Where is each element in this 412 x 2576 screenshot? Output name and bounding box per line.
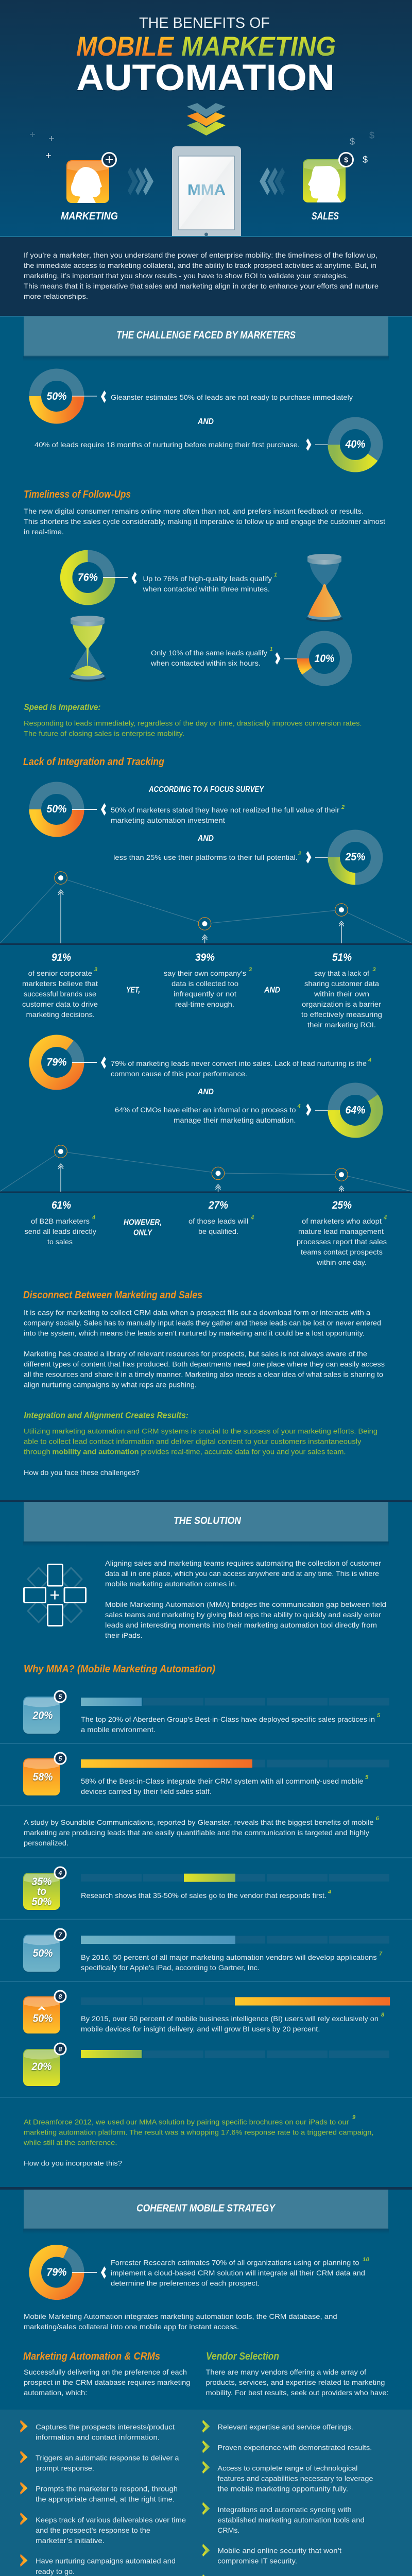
callout: less than 25 percent [113,851,340,863]
list: marketing automation bullets: marketer’s initiative. [36,2536,105,2545]
column: vendor selection intro [206,2351,389,2397]
stat row: 58 percent best in class: 5 [59,1755,62,1762]
text: aligning sales and marketing: sales teams and marketing by giving field reps the ability to quickly and easily enter [105,1611,381,1619]
heading: integration and alignment creates results: Integration and Alignment Creates Results: [24,1411,188,1420]
heading: disconnect between marketing and sales: Disconnect Between Marketing and Sales [23,1290,202,1301]
stat: 39 percent: data is collected too [171,979,238,988]
donut: 50 percent survey [35,788,78,831]
text: soundbite study: A study by Soundbite Communications, reported by Gleanster, reveals that the biggest benefits of mobile [24,1818,374,1826]
divider [0,1919,412,1920]
column: marketing automation and crms intro: Marketing Automation & CRMs [23,2351,160,2362]
stat row: 50 percent vendors: 50% [33,1947,53,1959]
text: mma integrates [24,2312,337,2331]
text: digital consumer: The new digital consumer remains online more often than not, and prefers instant feedback or results. [24,507,364,515]
donut: 79 percent [35,1041,78,1084]
callout: 50 percent of marketers: 50% of marketers stated they have not realized the full value of their [111,806,339,814]
stat: 25 percent: processes report that sales [297,1238,387,1246]
list: marketing automation bullets: information and contact information. [36,2433,160,2442]
stat: 91 percent: customer data to drive [22,1000,98,1008]
stat row: 58 percent best in class: 58% of the Best-in-Class integrate their CRM system with all commonly-used mobile [81,1777,364,1785]
donut: 50 percent survey: 50% [46,803,67,815]
text: disconnect paragraphs: It is easy for marketing to collect CRM data when a prospect fills out a download form or interacts with a [24,1309,370,1317]
stat: 27 percent: 27% [208,1199,228,1211]
text: digital consumer: This shortens the sales cycle considerably, making it imperative to follow up and engage the customer almost [24,517,385,526]
callout: gleanster 50 percent: Gleanster estimates 50% of leads are not ready to purchase immediately [111,393,353,401]
callout: 76 percent [103,572,277,593]
stat row: 50 percent vendors: By 2016, 50 percent of all major marketing automation vendors will develop applications [81,1953,377,1961]
intro text: more relationships. [24,292,88,300]
text: mma integrates: Mobile Marketing Automation integrates marketing automation tools, the CRM database, and [24,2312,337,2320]
title [76,15,336,98]
text: dreamforce 2012: while still at the conference. [23,2139,117,2147]
column: marketing automation and crms intro [23,2351,190,2397]
connector words: however only [124,1218,162,1238]
callout: 10 percent [150,646,309,667]
stat row: over 50 percent BI users: 8 [381,2012,385,2018]
text: utilizing marketing automation: through [24,1448,50,1456]
text: soundbite study: personalized. [24,1839,68,1847]
decorative dollar signs: $ [363,155,368,165]
line chart: 91 39 51 percent [0,872,412,945]
column: vendor selection intro: mobility. For best results, seek out providers who have: [206,2388,389,2397]
connector word: and: AND [197,1088,214,1096]
stat: 51 percent: to effectively measuring [301,1010,382,1019]
stat row: 20 percent best in class: 20% [32,1709,53,1721]
callout: forrester research: determine the preferences of each prospect. [111,2279,260,2287]
callout: 79 percent of leads: 4 [368,1057,371,1063]
stat row: 20 percent best in class [23,1691,389,1735]
list: marketing automation bullets: ready to go. [36,2567,75,2575]
callout: gleanster 50 percent [72,391,353,403]
title: AUTOMATION [76,58,335,98]
label: sales: SALES [312,211,339,222]
text: disconnect paragraphs: company socially. Sales has to manually input leads they gather and these leads can be lost or never entered [24,1319,381,1327]
stat row: 20 percent best in class: The top 20% of Aberdeen Group’s Best-in-Class have deployed specific sales practices in [81,1715,375,1723]
stat: 61 percent [25,1199,96,1246]
connector words: however only: ONLY [133,1229,152,1238]
list: vendor selection bullets: established marketing automation tools and [217,2516,365,2524]
arrows: marketing to tablet [128,167,153,195]
stat: 61 percent: 4 [92,1215,95,1221]
callout: forrester research [72,2257,370,2287]
text: utilizing marketing automation: able to collect lead contact information and deliver digital content to your customers instantaneously [24,1437,362,1446]
column: marketing automation and crms intro: prospect in the CRM database requires marketing [24,2378,190,2386]
stat row: 58 percent best in class: 58% [33,1771,53,1783]
donut: 76 percent: 76% [78,572,98,583]
donut: 40 percent [334,423,377,466]
column: marketing automation and crms intro: automation, which: [24,2388,87,2397]
stat: 91 percent: of senior corporate [28,969,92,977]
intro text: the immediate access to marketing collateral, and the ability to track prospect activities at anytime. But, in [24,261,376,269]
stat row: 35 to 50 percent [23,1867,389,1911]
text: aligning sales and marketing: Mobile Marketing Automation (MMA) bridges the communication gap between field [105,1600,386,1608]
stat: 51 percent: organization is a barrier [302,1000,381,1008]
line chart: 61 27 25 percent [0,1145,412,1193]
text: soundbite study [24,1816,380,1847]
panel: coherent mobile strategy [23,2190,389,2234]
text: disconnect paragraphs: Marketing has created a library of relevant resources for prospects, but sales is not always aware of the [24,1350,367,1358]
divider [0,1743,412,1744]
heading: timeliness of follow-ups: Timeliness of Follow-Ups [24,489,131,500]
text: aligning sales and marketing: mobile marketing automation comes in. [105,1580,237,1588]
callout: 79 percent of leads [72,1056,371,1078]
stat: 39 percent: 3 [249,967,252,973]
decorative dollar signs: $ [369,130,374,141]
stat: 25 percent: 4 [383,1215,387,1221]
stat: 39 percent [164,952,252,1008]
column: vendor selection intro: Vendor Selection [206,2351,279,2362]
text: digital consumer [24,507,385,536]
donut: 64 percent [334,1089,377,1132]
stat: 39 percent: 39% [195,952,215,963]
text: utilizing marketing automation [24,1427,377,1456]
callout: 76 percent: Up to 76% of high-quality leads qualify [143,574,272,583]
stat row: 20 percent best in class: a mobile environment. [81,1725,156,1734]
subheading: according to a focus survey: ACCORDING TO A FOCUS SURVEY [148,785,264,794]
stat: 61 percent: of B2B marketers [31,1217,90,1225]
stat row: 58 percent best in class [23,1753,389,1797]
panel: coherent mobile strategy: COHERENT MOBILE STRATEGY [136,2202,276,2214]
text: responding to leads [24,719,362,738]
divider [0,1805,412,1806]
stat row: over 50 percent BI users: mobile devices for insight delivery, and will grow BI users by 20 percent. [81,2025,320,2033]
list: marketing automation bullets: prompt response. [36,2464,94,2472]
connector word: yet: YET, [126,986,140,994]
connector word: and: AND [197,834,214,843]
stat: 25 percent: of marketers who adopt [302,1217,382,1225]
title: MARKETING [181,31,336,62]
stat row: over 50 percent BI users: By 2015, over 50 percent of mobile business intelligence (BI) users will rely exclusively on [81,2014,379,2023]
stat: 51 percent: within their own [314,990,369,998]
text: disconnect paragraphs: into the system, which means the leads aren’t nurtured by marketing and it could be a lost opportunity. [24,1329,365,1337]
icon: sales man [303,152,353,202]
connector word: and: AND [264,986,280,994]
stat: 25 percent: teams contact prospects [301,1248,383,1256]
stat: 51 percent [301,952,382,1029]
stat: 91 percent [22,952,98,1019]
stat row: 35 to 50 percent: Research shows that 35-50% of sales go to the vendor that responds first. [81,1891,327,1900]
callout: 79 percent of leads: common cause of this poor performance. [111,1070,247,1078]
list: vendor selection bullets: features and capabilities necessary to leverage [217,2474,373,2482]
stat: 39 percent: say their own company’s [164,969,246,977]
stat row: 20 percent BI growth: 8 [59,2045,62,2053]
stat row: 20 percent best in class: 5 [377,1713,381,1719]
panel: the solution: THE SOLUTION [174,1515,241,1527]
heading: why mma: Why MMA? (Mobile Marketing Automation) [24,1664,215,1675]
stat: 91 percent: marketers believe that [22,979,98,988]
list: vendor selection bullets: Proven experience with demonstrated results. [217,2444,372,2452]
list: vendor selection bullets: Integrations and automatic syncing with [217,2505,352,2514]
stat: 61 percent: to sales [47,1238,73,1246]
donut: 50 percent: 50% [46,391,67,402]
stat row: 20 percent BI growth: 20% [31,2061,52,2073]
heading: speed is imperative: Speed is Imperative: [24,702,101,712]
stat: 91 percent: marketing decisions. [26,1010,95,1019]
donut: 25 percent [334,836,377,879]
callout: forrester research: Forrester Research estimates 70% of all organizations using or planning to [111,2258,359,2266]
text: aligning sales and marketing: leads and interesting moments into their marketing automation tool directly from [105,1621,377,1629]
list: vendor selection bullets: Relevant expertise and service offerings. [217,2423,353,2431]
arrows: sales to tablet [260,167,285,195]
text: dreamforce 2012: 9 [352,2114,356,2121]
text: utilizing marketing automation: Utilizing marketing automation and CRM systems is crucial to the success of your marketing efforts. Being [24,1427,377,1435]
stat row: 58 percent best in class: devices carried by their field sales staff. [81,1787,212,1795]
stat row: 58 percent best in class: 5 [365,1774,369,1781]
donut: 76 percent [66,556,109,599]
stat row: 35 to 50 percent: 4 [328,1889,331,1895]
callout: 50 percent of marketers: marketing automation investment [111,816,225,824]
intro text: If you’re a marketer, then you understand the power of enterprise mobility: the timeliness of the follow up, [24,251,377,259]
stat row: 35 to 50 percent: 50% [32,1896,52,1908]
text: dreamforce 2012 [23,2114,373,2147]
stat: 25 percent: mature lead management [298,1227,384,1235]
stat: 25 percent [297,1199,387,1266]
intro text: This means that it is imperative that sales and marketing align in order to enhance your efforts and nurture [24,282,379,290]
callout: 50 percent of marketers: 2 [341,804,345,810]
callout: 10 percent: Only 10% of the same leads qualify [151,649,267,657]
stat: 61 percent: 61% [52,1199,71,1211]
callout: 10 percent: when contacted within six hours. [150,659,261,667]
stat row: 50 percent vendors [23,1929,389,1973]
text: responding to leads: The future of closing sales is enterprise mobility. [24,730,184,738]
icon: stacked chevrons [187,103,226,135]
callout: 64 percent of CMOs [115,1104,340,1124]
list: marketing automation bullets: Keeps track of various deliverables over time [36,2516,186,2524]
icon: tablet with MMA: MMA [187,182,226,198]
list: marketing automation bullets: and the prospect’s response to the [36,2526,150,2534]
donut: 25 percent: 25% [345,851,366,863]
stat row: 50 percent vendors: 7 [379,1951,383,1957]
text: dreamforce 2012: At Dreamforce 2012, we used our MMA solution by pairing specific brochures on our iPads to our [24,2118,349,2126]
text: responding to leads: Responding to leads immediately, regardless of the day or time, drastically improves conversion rates. [24,719,362,727]
callout: 64 percent of CMOs: 4 [297,1104,301,1110]
list: marketing automation bullets [20,2420,186,2576]
stat: 25 percent: 25% [332,1199,352,1211]
donut: 10 percent [303,637,346,680]
stat row: 20 percent BI growth [23,2043,389,2087]
text: dreamforce 2012: marketing automation platform. The result was a whopping 17.6% response rate to a triggered campaign, [24,2128,374,2137]
divider [0,1857,412,1858]
callout: 64 percent of CMOs: manage their marketing automation. [174,1116,296,1124]
text: utilizing marketing automation: provides real-time, accurate data for you and your sales team. [141,1448,346,1456]
stat row: 20 percent best in class: 5 [59,1693,62,1700]
text: how do you incorporate this: How do you incorporate this? [24,2159,122,2167]
callout: 76 percent: when contacted within three minutes. [142,585,270,593]
stat row: 35 to 50 percent: 35% [32,1876,52,1888]
intro text: marketing, it’s important that you show results - you have to show ROI to validate your strategies. [24,272,348,280]
list: vendor selection bullets: CRMs. [217,2526,239,2534]
callout: 10 percent: 1 [270,646,273,652]
stat: 39 percent: real-time enough. [175,1000,234,1008]
decorative plus signs: + [45,150,52,162]
title: MOBILE [76,31,175,62]
text: mma integrates: marketing/sales collateral into one mobile app for instant access. [24,2323,239,2331]
list: vendor selection bullets: compromise IT security. [217,2557,297,2565]
donut: 40 percent: 40% [345,438,366,450]
divider [0,2097,412,2098]
stat: 91 percent: successful brands use [24,990,96,998]
callout: 79 percent of leads: 79% of marketing leads never convert into sales. Lack of lead nurturing is the [111,1059,367,1067]
column: vendor selection intro: There are many vendors offering a wide array of [206,2368,366,2376]
list: marketing automation bullets: Triggers an automatic response to deliver a [36,2454,179,2462]
icon: tablets cross [24,1564,85,1626]
text: disconnect paragraphs: all the resources and share it in a timely manner. Marketing also needs a clear idea of what sales is sharing to [24,1370,383,1378]
donut: 64 percent: 64% [345,1105,366,1116]
stat row: over 50 percent BI users: 8 [59,1993,62,2000]
label: marketing: MARKETING [61,211,118,222]
list: vendor selection bullets: the mobile marketing opportunity fully. [217,2484,348,2493]
stat: 39 percent: infrequently or not [174,990,236,998]
stat row: 50 percent vendors: 7 [59,1931,63,1938]
callout: less than 25 percent: 2 [298,851,301,857]
stat: 91 percent: 3 [94,967,97,973]
callout: forrester research: implement a cloud-based CRM solution will integrate all their CRM data and [111,2268,365,2277]
stat: 51 percent: their marketing ROI. [307,1021,376,1029]
stat row: 35 to 50 percent: 4 [58,1869,62,1876]
panel: the solution [23,1502,389,1547]
list: marketing automation bullets: Have nurturing campaigns automated and [36,2557,176,2565]
callout: 40 percent of leads [35,438,340,451]
title: THE BENEFITS OF [139,15,270,31]
donut: 10 percent: 10% [314,653,335,665]
list: marketing automation bullets: Captures the prospects interests/product [36,2423,175,2431]
divider [0,1981,412,1982]
intro text [24,251,379,300]
text: utilizing marketing automation: mobility and automation [53,1448,139,1456]
stat: 51 percent: sharing customer data [304,979,379,988]
stat: 91 percent: 91% [52,952,71,963]
callout: less than 25 percent: less than 25% use their platforms to their full potential. [113,853,298,861]
list: marketing automation bullets: the appropriate channel, at the right time. [36,2495,175,2503]
list: vendor selection bullets: Access to complete range of technological [217,2464,357,2472]
stat row: 50 percent vendors: specifically for Apple's iPad, according to Gartner, Inc. [81,1963,260,1972]
callout: forrester research: 10 [363,2257,370,2263]
decorative dollar signs [350,130,374,165]
panel: the challenge faced by marketers: THE CHALLENGE FACED BY MARKETERS [116,330,296,341]
icon: tablet with MMA [172,146,241,236]
stat: 27 percent: be qualified. [198,1227,238,1235]
stat: 51 percent: say that a lack of [314,969,369,977]
stat: 51 percent: 51% [332,952,352,963]
donut: 79 percent crm [35,2251,78,2294]
donut: 50 percent [35,375,78,418]
column: vendor selection intro: products, services, and expertise related to marketing [206,2378,385,2386]
text: aligning sales and marketing [105,1559,386,1639]
decorative plus signs: + [48,133,55,145]
stat: 25 percent: within one day. [316,1258,367,1266]
list: vendor selection bullets: Mobile and online security that won’t [217,2547,341,2555]
text: disconnect paragraphs: align nurturing campaigns by what reps are pushing. [24,1380,197,1388]
list: marketing automation bullets: Prompts the marketer to respond, through [36,2484,178,2493]
donut: 79 percent: 79% [46,1057,67,1069]
stat row: 35 to 50 percent: to [37,1886,46,1897]
text: digital consumer: in real-time. [24,528,64,536]
text: how do you face these challenges: How do you face these challenges? [24,1468,140,1477]
column: marketing automation and crms intro: Successfully delivering on the preference of each [24,2368,187,2376]
icon: green hourglass [69,616,106,682]
heading: lack of integration and tracking: Lack of Integration and Tracking [23,756,164,768]
text: soundbite study: marketing are producing leads that are easily quantifiable and the communication is targeted and highly [24,1828,369,1837]
panel: the challenge faced by marketers [23,316,389,361]
text: soundbite study: 6 [376,1816,380,1822]
callout: 64 percent of CMOs: 64% of CMOs have either an informal or no process to [115,1106,296,1114]
connector words: however only: HOWEVER, [124,1218,162,1227]
callout: 40 percent of leads: 40% of leads require 18 months of nurturing before making their first purchase. [35,440,300,449]
decorative plus signs: + [29,129,36,141]
stat: 27 percent: of those leads will [188,1217,248,1225]
icon: marketing woman [66,152,116,203]
connector word: and: AND [197,417,214,426]
stat: 27 percent [188,1199,254,1235]
stat: 51 percent: 3 [373,967,376,973]
stat: 27 percent: 4 [250,1215,254,1221]
stat row: over 50 percent BI users [23,1991,390,2035]
list: vendor selection bullets [202,2420,373,2576]
text: disconnect paragraphs: different types of content that has produced. Both departments need one place where they can easily access [24,1360,385,1368]
callout: 50 percent of marketers [72,803,345,824]
text: aligning sales and marketing: their iPads. [105,1631,142,1639]
icon: orange hourglass [306,554,343,622]
decorative plus signs [29,129,55,162]
icon: sales man: $ [344,156,348,164]
text: aligning sales and marketing: data all in one place, which you can access anywhere and at any time. This is where [105,1569,379,1578]
decorative dollar signs: $ [350,137,355,147]
callout: 76 percent: 1 [274,572,277,578]
text: disconnect paragraphs [24,1309,385,1388]
donut: 79 percent crm: 79% [46,2266,67,2278]
text: aligning sales and marketing: Aligning sales and marketing teams requires automating the collection of customer [105,1559,381,1567]
stat: 61 percent: send all leads directly [25,1227,96,1235]
stat row: over 50 percent BI users: 50% [33,2013,53,2025]
